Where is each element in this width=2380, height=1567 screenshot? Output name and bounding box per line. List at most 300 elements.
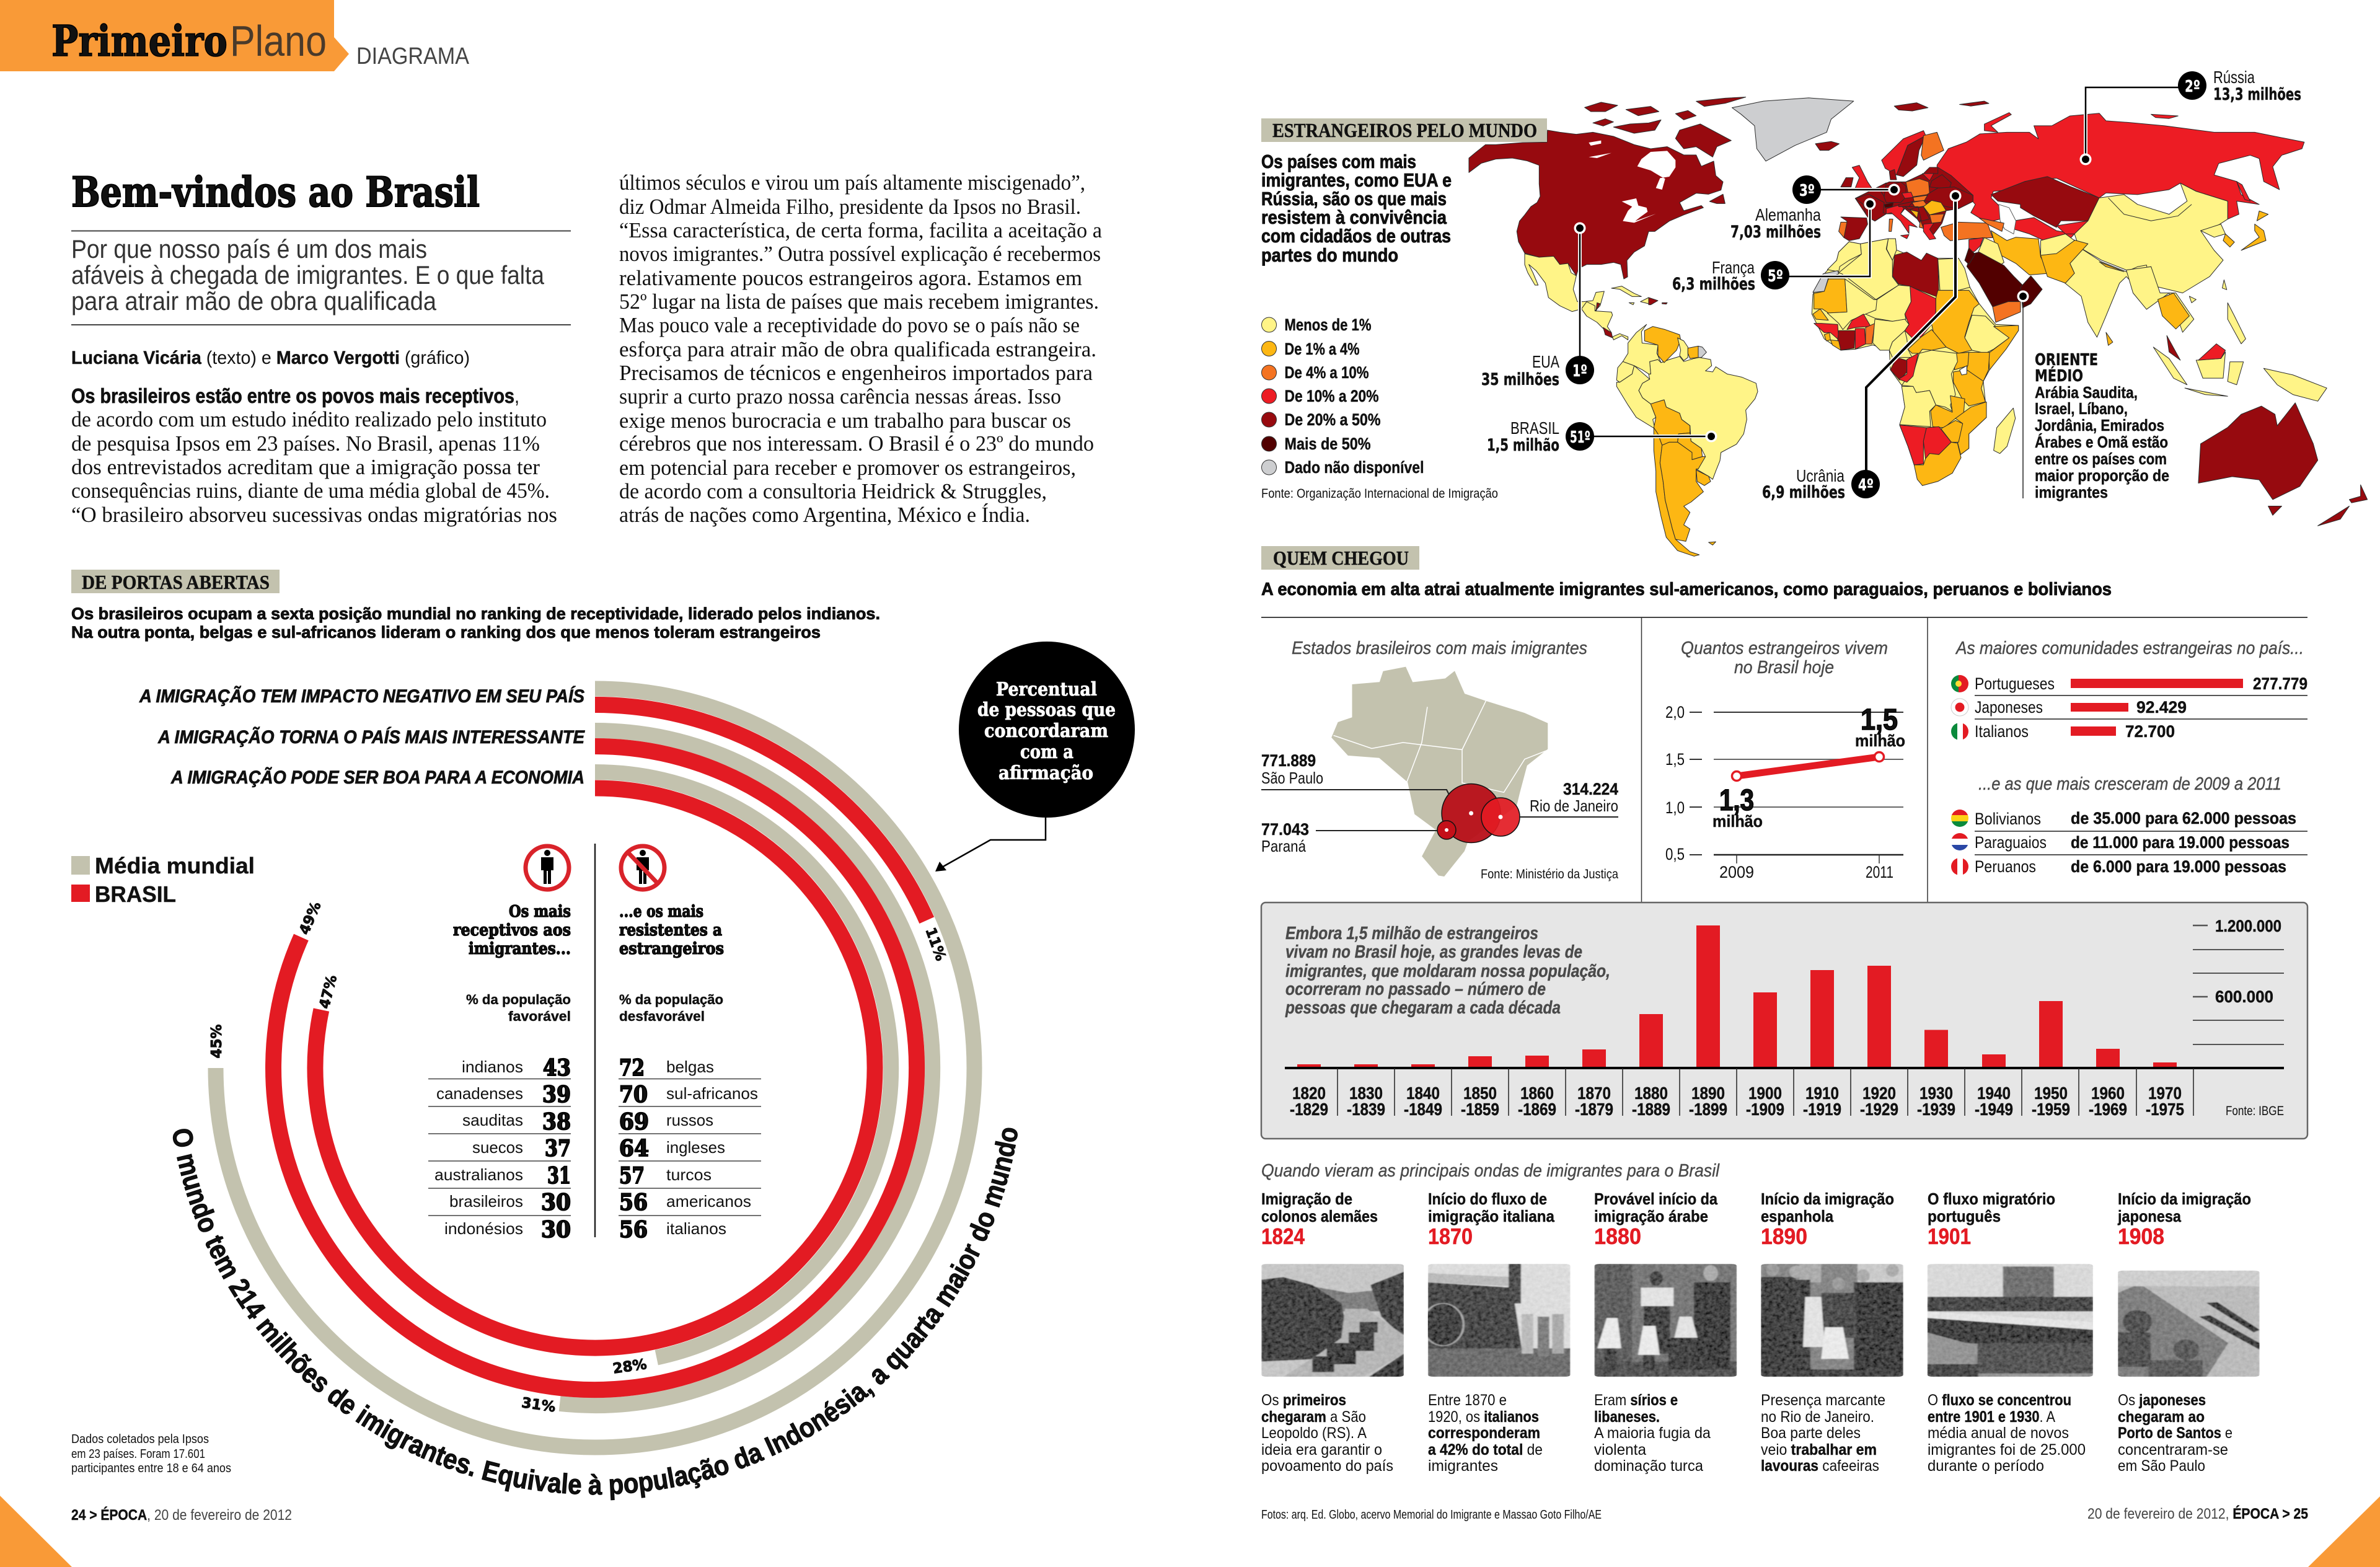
source: Fonte: IBGE bbox=[2226, 1104, 2284, 1118]
decade labels: 1910 bbox=[1805, 1084, 1839, 1103]
data line bbox=[1732, 753, 1884, 781]
bubble: São Paulo: 771.889 bbox=[1261, 751, 1316, 770]
body text: Boa parte deles bbox=[1761, 1424, 1861, 1442]
photo credits: Fotos: arq. Ed. Globo, acervo Memorial do Imigrante e Massao Goto Filho/AE bbox=[1261, 1508, 1602, 1522]
body text: Os primeiros bbox=[1261, 1392, 1346, 1409]
bubble: Paraná: Paraná bbox=[1261, 837, 1306, 855]
ranking: most resistant: turcos bbox=[666, 1165, 712, 1184]
body text: Porto de Santos e bbox=[2118, 1424, 2232, 1442]
timeline column: 1824: colonos alemães bbox=[1261, 1207, 1378, 1225]
ranking: most resistant: 57 bbox=[619, 1163, 645, 1189]
body text: Presença marcante bbox=[1761, 1392, 1885, 1409]
icon: person prohibited bbox=[621, 846, 664, 889]
row: Paraguaios: Paraguaios bbox=[1975, 833, 2047, 852]
legend: ring chart: Média mundial bbox=[95, 853, 255, 878]
axis and dividers bbox=[1285, 1068, 2284, 1116]
body text: dominação turca bbox=[1594, 1457, 1703, 1475]
body text: durante o período bbox=[1928, 1457, 2044, 1475]
leader: 5th France: 5º bbox=[1768, 267, 1783, 286]
decade labels: 1860 bbox=[1520, 1084, 1554, 1103]
callout: Middle East: ORIENTE bbox=[2035, 351, 2098, 369]
section header: Primeiro Plano tab: Plano bbox=[230, 17, 327, 65]
photo: Spanish family portrait bbox=[1761, 1263, 1903, 1377]
row: Bolivianos: Bolivianos bbox=[1975, 810, 2041, 828]
Europe, North Africa, Middle East bbox=[1812, 166, 2042, 485]
decade labels: 1970 bbox=[2148, 1084, 2182, 1103]
heading: most resistant: desfavorável bbox=[619, 1009, 705, 1024]
article text column 2: últimos séculos e virou um país altamente miscigenado”, bbox=[619, 170, 1085, 195]
callout: Middle East: Arábia Saudita, bbox=[2035, 383, 2138, 402]
map intro text bbox=[1261, 151, 1452, 266]
decade labels: -1975 bbox=[2146, 1100, 2184, 1119]
article text column 2: Precisamos de técnicos e engenheiros importados para bbox=[619, 361, 1093, 385]
heading: most receptive: favorável bbox=[508, 1009, 571, 1024]
curved caption around rings: O mundo tem 214 milhões de imigrantes. Equivale à população da Indonésia, a quarta maior do mundo bbox=[172, 1128, 1018, 1500]
bubble: Rio de Janeiro bbox=[1481, 780, 1618, 836]
row: Japoneses: Japoneses bbox=[1975, 698, 2043, 717]
body text: Os japoneses bbox=[2118, 1392, 2206, 1409]
article text column 2: atrás de nações como Argentina, México e Índia. bbox=[619, 503, 1030, 527]
leader: 4th Ukraine: 6,9 milhões bbox=[1762, 483, 1845, 502]
axis and grid: 2,0 bbox=[1665, 703, 1685, 722]
timeline column: 1824: 1824 bbox=[1261, 1224, 1305, 1249]
ranking: most receptive: brasileiros bbox=[449, 1192, 523, 1211]
heading: most receptive: % da população bbox=[466, 992, 571, 1007]
body text: lavouras cafeeiras bbox=[1761, 1457, 1879, 1475]
leader: 51st Brazil: 51º bbox=[1570, 428, 1590, 447]
heading: most receptive bbox=[453, 903, 571, 1024]
heading: most resistant: resistentes a bbox=[619, 921, 722, 940]
ranking: most receptive: 30 bbox=[541, 1190, 571, 1216]
article text column 2: suprir a curto prazo nossa carência nessas áreas. Isso bbox=[619, 384, 1061, 408]
timeline column: 1824: Imigração de bbox=[1261, 1190, 1352, 1208]
ranking: most resistant: italianos bbox=[666, 1219, 726, 1238]
photo: farm machine bbox=[1423, 1264, 1571, 1377]
timeline column: 1908 bbox=[2117, 1190, 2260, 1475]
corner: left bbox=[0, 1496, 72, 1567]
decade labels: 1820 bbox=[1292, 1084, 1326, 1103]
decade labels: -1919 bbox=[1803, 1100, 1841, 1119]
timeline column: 1870: Início do fluxo de bbox=[1428, 1190, 1547, 1208]
ranking: most resistant: 56 bbox=[619, 1190, 648, 1216]
source note: Ipsos: participantes entre 18 e 64 anos bbox=[71, 1462, 231, 1475]
source note: Ipsos: em 23 países. Foram 17.601 bbox=[71, 1447, 205, 1461]
ranking: most receptive: indianos bbox=[462, 1057, 523, 1076]
article text column 1: de acordo com um estudo inédito realizado pelo instituto bbox=[71, 407, 547, 431]
ranking: most resistant: 70 bbox=[619, 1082, 648, 1108]
axis and grid bbox=[1665, 703, 1903, 881]
map of Brazil bbox=[1330, 665, 1549, 878]
body text: veio trabalhar em bbox=[1761, 1441, 1877, 1459]
axis and grid: 0,5 bbox=[1665, 845, 1685, 863]
body text bbox=[1928, 1392, 2086, 1475]
panel: largest foreign communities bbox=[1951, 638, 2307, 876]
value scale: 600.000 bbox=[2215, 987, 2273, 1006]
row: Italianos bbox=[1951, 723, 2174, 740]
bubble: Paraná bbox=[1261, 820, 1456, 855]
leader: 3rd Germany: 3º bbox=[1799, 182, 1815, 200]
ring: grey 28% bbox=[595, 772, 891, 1357]
map legend: De 10% a 20% bbox=[1284, 387, 1378, 405]
body text bbox=[1261, 1392, 1393, 1475]
map legend: Menos de 1% bbox=[1284, 316, 1371, 334]
article text column 1: “O brasileiro absorveu sucessivas ondas migratórias nos bbox=[71, 503, 557, 527]
callout: Middle East bbox=[2017, 290, 2169, 501]
heading: most resistant: estrangeiros bbox=[619, 940, 724, 958]
body text: média anual de novos bbox=[1928, 1424, 2069, 1442]
article text column 1 bbox=[71, 384, 557, 527]
leader: 51st Brazil: BRASIL bbox=[1510, 418, 1559, 438]
timeline column: 1880: 1880 bbox=[1594, 1224, 1641, 1249]
decade labels: 1900 bbox=[1748, 1084, 1782, 1103]
article text column 2: diz Odmar Almeida Filho, presidente da Ipsos no Brasil. bbox=[619, 195, 1081, 219]
subtitle: Por que nosso país é um dos mais bbox=[71, 234, 427, 263]
section tag: Estrangeiros pelo mundo: ESTRANGEIROS PELO MUNDO bbox=[1272, 119, 1537, 141]
body text: violenta bbox=[1594, 1441, 1646, 1459]
callout: Middle East: Árabes e Omã estão bbox=[2035, 433, 2168, 451]
decade labels: 1840 bbox=[1406, 1084, 1440, 1103]
decade labels: -1859 bbox=[1461, 1100, 1499, 1119]
bars bbox=[1297, 925, 2177, 1067]
bubble: Paraná: 77.043 bbox=[1261, 820, 1309, 839]
timeline column: 1908: Início da imigração bbox=[2118, 1190, 2251, 1208]
body text: 1920, os italianos bbox=[1428, 1408, 1539, 1426]
section intro: De portas abertas bbox=[71, 604, 880, 642]
leader: 2nd Russia bbox=[2080, 68, 2301, 165]
Greenland, Iceland, Eurasia and Oceania bbox=[1732, 98, 2368, 526]
callout bubble: afirmação bbox=[998, 762, 1093, 784]
photo: passport and scissors bbox=[2118, 1271, 2260, 1377]
legend: ring chart bbox=[71, 853, 255, 907]
ring percentage labels: 31% bbox=[521, 1395, 557, 1416]
ring percentage labels: 45% bbox=[209, 1024, 225, 1059]
map legend: Mais de 50% bbox=[1284, 435, 1371, 453]
row: Portugueses: 277.779 bbox=[2253, 674, 2307, 693]
row: Japoneses: 92.429 bbox=[2136, 698, 2187, 717]
leader: 1st USA: 1º bbox=[1572, 362, 1587, 381]
statement labels: A IMIGRAÇÃO TORNA O PAÍS MAIS INTERESSANTE bbox=[157, 726, 585, 748]
callout bubble: de pessoas que bbox=[977, 699, 1116, 721]
panel: immigrants per decade bar chart bbox=[1261, 903, 2307, 1139]
ranking: most receptive bbox=[428, 1055, 571, 1243]
ranking: most receptive: 43 bbox=[543, 1055, 571, 1081]
timeline column: 1870 bbox=[1423, 1190, 1571, 1475]
heading: most resistant: ...e os mais bbox=[619, 903, 703, 921]
section tag: De portas abertas: DE PORTAS ABERTAS bbox=[82, 571, 270, 593]
leader: 1st USA: EUA bbox=[1532, 352, 1559, 371]
decade labels: 1920 bbox=[1862, 1084, 1896, 1103]
timeline column: 1901: 1901 bbox=[1928, 1224, 1971, 1249]
timeline column: 1880: imigração árabe bbox=[1594, 1207, 1708, 1225]
row: Peruanos bbox=[1951, 857, 2286, 876]
source note: Ipsos: Dados coletados pela Ipsos bbox=[71, 1432, 209, 1446]
map intro text: resistem à convivência bbox=[1261, 206, 1447, 228]
article text column 1: dos entrevistados acreditam que a imigração possa ter bbox=[71, 455, 540, 479]
leader: 1st USA: 35 milhões bbox=[1481, 370, 1559, 389]
ranking: most receptive: 30 bbox=[541, 1217, 571, 1243]
timeline column: 1901: português bbox=[1928, 1207, 2001, 1225]
row: Portugueses: Portugueses bbox=[1975, 674, 2055, 693]
decade labels: -1879 bbox=[1575, 1100, 1613, 1119]
ranking: most resistant: russos bbox=[666, 1111, 713, 1129]
decade labels: 1880 bbox=[1634, 1084, 1668, 1103]
heading: fastest growing: ...e as que mais cresceram de 2009 a 2011 bbox=[1978, 774, 2281, 794]
legend: ring chart: BRASIL bbox=[95, 881, 176, 907]
row: Japoneses bbox=[1951, 698, 2307, 719]
bubble: São Paulo: São Paulo bbox=[1261, 769, 1323, 787]
value scale bbox=[2193, 917, 2284, 1044]
heading bbox=[1681, 638, 1888, 678]
panel text: Embora 1,5 milhão de estrangeiros bbox=[1285, 924, 1538, 943]
panel text bbox=[1285, 924, 1610, 1018]
leader: 4th Ukraine bbox=[1762, 190, 1961, 502]
article text column 1: de pesquisa Ipsos em 23 países. No Brasil, apenas 11% bbox=[71, 431, 540, 456]
ranking: most receptive: sauditas bbox=[462, 1111, 523, 1129]
axis and grid: 2009 bbox=[1719, 863, 1754, 881]
arrow: callout to ring bbox=[935, 818, 1046, 872]
ranking: most receptive: canadenses bbox=[436, 1084, 523, 1103]
body text: concentraram-se bbox=[2118, 1441, 2228, 1459]
timeline heading: Quando vieram as principais ondas de imigrantes para o Brasil bbox=[1261, 1161, 1720, 1181]
map legend: De 1% a 4% bbox=[1284, 340, 1360, 358]
footer left: 24 > ÉPOCA, 20 de fevereiro de 2012 bbox=[71, 1506, 292, 1524]
leader: 3rd Germany: Alemanha bbox=[1755, 205, 1821, 224]
statement labels: A IMIGRAÇÃO PODE SER BOA PARA A ECONOMIA bbox=[170, 767, 584, 788]
timeline column: 1908: 1908 bbox=[2118, 1224, 2164, 1249]
leader: 51st Brazil: 1,5 milhão bbox=[1487, 436, 1559, 455]
timeline column: 1890: 1890 bbox=[1761, 1224, 1807, 1249]
article text column 2: exige menos burocracia e um trabalho para buscar os bbox=[619, 408, 1071, 433]
row: Italianos: 72.700 bbox=[2125, 722, 2175, 741]
leader: 3rd Germany bbox=[1730, 175, 1900, 242]
article text column 1: consequências ruins, diante de uma média global de 45%. bbox=[71, 479, 550, 503]
subtitle bbox=[71, 231, 571, 325]
article text column 2: “Essa característica, de certa forma, facilita a aceitação a bbox=[619, 218, 1102, 242]
body text: libaneses. bbox=[1594, 1408, 1660, 1426]
ring: grey 31% bbox=[560, 730, 933, 1406]
panel text: vivam no Brasil hoje, as grandes levas de bbox=[1285, 942, 1582, 962]
value labels: milhão bbox=[1712, 812, 1763, 831]
leader: 3rd Germany: 7,03 milhões bbox=[1730, 223, 1821, 242]
body text: a 42% do total de bbox=[1428, 1441, 1543, 1459]
ranking: most receptive: 39 bbox=[542, 1082, 571, 1108]
decade labels: -1839 bbox=[1347, 1100, 1385, 1119]
subtitle: para atrair mão de obra qualificada bbox=[71, 286, 437, 316]
body text: entre 1901 e 1930. A bbox=[1928, 1408, 2055, 1426]
decade labels: 1890 bbox=[1691, 1084, 1725, 1103]
row: Paraguaios bbox=[1951, 833, 2307, 855]
statement labels bbox=[139, 686, 585, 788]
row: Portugueses bbox=[1951, 674, 2307, 695]
timeline column: 1890: Início da imigração bbox=[1761, 1190, 1894, 1208]
source: Fonte: Ministério da Justiça bbox=[1481, 867, 1618, 881]
ranking: most receptive: australianos bbox=[434, 1165, 523, 1184]
Sub-Saharan Africa bbox=[1813, 279, 2019, 485]
article text column 1: Os brasileiros estão entre os povos mais receptivos, bbox=[71, 384, 519, 407]
timeline column: 1824 bbox=[1261, 1190, 1404, 1475]
decade labels: -1959 bbox=[2032, 1100, 2070, 1119]
footer right: 20 de fevereiro de 2012, ÉPOCA > 25 bbox=[2087, 1505, 2308, 1522]
North and Central America bbox=[1469, 97, 1746, 340]
decade labels: -1949 bbox=[1975, 1100, 2013, 1119]
body text: Entre 1870 e bbox=[1428, 1392, 1507, 1409]
value scale: 1.200.000 bbox=[2215, 917, 2281, 935]
heading: Quantos estrangeiros vivem bbox=[1681, 638, 1888, 658]
section header: Primeiro Plano tab bbox=[0, 0, 470, 71]
heading: most receptive: receptivos aos bbox=[453, 921, 571, 940]
axis and grid: 1,5 bbox=[1665, 750, 1685, 769]
heading: most receptive: Os mais bbox=[509, 903, 571, 921]
ring: red 47% bbox=[315, 788, 875, 1348]
article text column 2: relativamente poucos estrangeiros agora. Estamos em bbox=[619, 266, 1082, 290]
body text: povoamento do país bbox=[1261, 1457, 1393, 1475]
callout: Middle East: maior proporção de bbox=[2035, 466, 2169, 485]
leader: 2nd Russia: 13,3 milhões bbox=[2213, 85, 2301, 104]
bubble: Rio de Janeiro: Rio de Janeiro bbox=[1530, 797, 1618, 815]
body text: Eram sírios e bbox=[1594, 1392, 1678, 1409]
leader: 51st Brazil bbox=[1487, 418, 1717, 455]
timeline column: 1908: japonesa bbox=[2117, 1207, 2181, 1225]
ring percentage labels bbox=[209, 899, 949, 1416]
body text bbox=[1594, 1392, 1711, 1475]
heading: no Brasil hoje bbox=[1734, 658, 1834, 678]
leader: 5th France: França bbox=[1712, 258, 1755, 277]
photo: ship at dock bbox=[1928, 1264, 2093, 1377]
panel: foreigners living in Brazil line chart bbox=[1665, 638, 1905, 881]
article text column 2: em potencial para receber e promover os estrangeiros, bbox=[619, 456, 1076, 480]
corner: right bbox=[2308, 1496, 2380, 1567]
body text bbox=[2118, 1392, 2232, 1475]
article text column 2 bbox=[619, 170, 1102, 527]
value labels bbox=[1712, 704, 1905, 831]
row: Italianos: Italianos bbox=[1975, 722, 2029, 741]
body text: chegaram a São bbox=[1261, 1408, 1366, 1426]
timeline column: 1880 bbox=[1594, 1190, 1737, 1475]
ring percentage labels: 11% bbox=[922, 925, 949, 963]
ring: grey 45% bbox=[216, 689, 974, 1447]
panel text: ocorreram no passado – número de bbox=[1285, 979, 1546, 999]
world map bbox=[1469, 97, 2368, 556]
decade labels: -1929 bbox=[1860, 1100, 1898, 1119]
map legend: De 20% a 50% bbox=[1284, 410, 1381, 429]
body text: imigrantes foi de 25.000 bbox=[1928, 1441, 2086, 1459]
map intro text: com cidadãos de outras bbox=[1261, 225, 1451, 247]
row: Peruanos: de 6.000 para 19.000 pessoas bbox=[2071, 857, 2286, 876]
ranking: most resistant bbox=[619, 1055, 761, 1243]
map intro text: imigrantes, como EUA e bbox=[1261, 169, 1452, 191]
ranking: most resistant: sul-africanos bbox=[666, 1084, 758, 1103]
leader: 5th France: 6,3 milhões bbox=[1672, 275, 1755, 294]
decade labels: 1830 bbox=[1349, 1084, 1383, 1103]
section intro: Quem chegou: A economia em alta atrai atualmente imigrantes sul-americanos, como paraguaios, peruanos e bolivianos bbox=[1261, 580, 2112, 599]
bubble: São Paulo bbox=[1261, 751, 1501, 843]
decade labels: -1939 bbox=[1917, 1100, 1955, 1119]
decade labels: -1829 bbox=[1290, 1100, 1328, 1119]
decade labels: 1850 bbox=[1463, 1084, 1497, 1103]
body text bbox=[1428, 1392, 1543, 1475]
body text: ideia era garantir o bbox=[1261, 1441, 1382, 1459]
heading: most resistant: % da população bbox=[619, 992, 723, 1007]
decade labels: -1969 bbox=[2089, 1100, 2127, 1119]
body text bbox=[1761, 1392, 1885, 1475]
ranking: most resistant: belgas bbox=[666, 1057, 714, 1076]
photo: colonists' street bbox=[1261, 1264, 1404, 1377]
timeline column: 1890: espanhola bbox=[1761, 1207, 1833, 1225]
ranking: most resistant: 64 bbox=[619, 1136, 649, 1162]
ranking: most receptive: suecos bbox=[472, 1138, 523, 1157]
statement labels: A IMIGRAÇÃO TEM IMPACTO NEGATIVO EM SEU PAÍS bbox=[139, 686, 584, 707]
panel: states with most immigrants bbox=[1261, 638, 1618, 881]
ranking: most resistant: americanos bbox=[666, 1192, 751, 1211]
value labels: 1,5 bbox=[1861, 704, 1898, 736]
section tag: Quem chegou: QUEM CHEGOU bbox=[1273, 547, 1409, 569]
timeline column: 1901: O fluxo migratório bbox=[1928, 1190, 2055, 1208]
heading: most resistant bbox=[619, 903, 724, 1024]
map source: Fonte: Organização Internacional de Imigração bbox=[1261, 487, 1498, 501]
map legend: De 4% a 10% bbox=[1284, 363, 1368, 382]
ring percentage labels: 49% bbox=[296, 899, 325, 937]
decade labels: -1889 bbox=[1632, 1100, 1670, 1119]
section header: Primeiro Plano tab: Primeiro bbox=[51, 17, 227, 66]
body text: Leopoldo (RS). A bbox=[1261, 1424, 1367, 1442]
ranking: most resistant: 56 bbox=[619, 1217, 648, 1243]
ranking: most receptive: 37 bbox=[545, 1136, 571, 1162]
leader: 4th Ukraine: 4º bbox=[1858, 476, 1874, 495]
map intro text: Os países com mais bbox=[1261, 151, 1416, 172]
map intro text: partes do mundo bbox=[1261, 244, 1398, 266]
source note: Ipsos bbox=[71, 1432, 231, 1475]
article text column 2: cérebros que nos interessam. O Brasil é o 23º do mundo bbox=[619, 431, 1094, 456]
byline: Luciana Vicária (texto) e Marco Vergotti (gráfico) bbox=[71, 348, 470, 368]
body text: A maioria fugia da bbox=[1594, 1424, 1711, 1442]
section intro: De portas abertas: Na outra ponta, belgas e sul-africanos lideram o ranking dos que menos toleram estrangeiros bbox=[71, 623, 821, 642]
ring percentage labels: 47% bbox=[317, 973, 340, 1010]
row: Paraguaios: de 11.000 para 19.000 pessoas bbox=[2071, 833, 2290, 852]
leader: 2nd Russia: 2º bbox=[2185, 77, 2200, 96]
timeline column: 1901 bbox=[1928, 1190, 2093, 1475]
timeline column: 1880: Provável início da bbox=[1594, 1190, 1717, 1208]
body text: em São Paulo bbox=[2118, 1457, 2205, 1475]
article text column 2: de acordo com a consultoria Heidrick & Struggles, bbox=[619, 479, 1047, 503]
map legend: Dado não disponível bbox=[1284, 458, 1424, 477]
callout bubble bbox=[959, 642, 1135, 818]
section header: Primeiro Plano tab: DIAGRAMA bbox=[356, 43, 470, 69]
ranking: most resistant: 69 bbox=[619, 1109, 649, 1135]
callout bubble: com a bbox=[1020, 741, 1073, 763]
article text column 2: 52º lugar na lista de países que mais recebem imigrantes. bbox=[619, 289, 1099, 314]
axis and grid: 2011 bbox=[1866, 863, 1893, 881]
ranking: most receptive: 31 bbox=[547, 1163, 571, 1189]
value labels: 1,3 bbox=[1719, 784, 1754, 817]
decade labels: -1899 bbox=[1689, 1100, 1727, 1119]
timeline column: 1870: imigração italiana bbox=[1428, 1207, 1554, 1225]
decade labels: -1909 bbox=[1746, 1100, 1784, 1119]
ring chart bbox=[209, 689, 974, 1447]
icon: person allowed bbox=[526, 846, 569, 889]
heading: As maiores comunidades estrangeiras no país... bbox=[1955, 638, 2304, 658]
article title: Bem-vindos ao Brasil bbox=[71, 168, 480, 216]
decade labels: -1849 bbox=[1404, 1100, 1442, 1119]
decade labels bbox=[1290, 1084, 2184, 1119]
section intro: De portas abertas: Os brasileiros ocupam a sexta posição mundial no ranking de receptividade, liderado pelos indianos. bbox=[71, 604, 880, 623]
South America bbox=[1616, 324, 1758, 556]
body text: imigrantes bbox=[1428, 1457, 1498, 1475]
callout: Middle East: Jordânia, Emirados bbox=[2035, 416, 2164, 435]
panel text: imigrantes, que moldaram nossa população, bbox=[1285, 961, 1610, 981]
row: Bolivianos bbox=[1951, 809, 2307, 831]
decade labels: -1869 bbox=[1518, 1100, 1556, 1119]
ranking: most resistant: ingleses bbox=[666, 1138, 725, 1157]
